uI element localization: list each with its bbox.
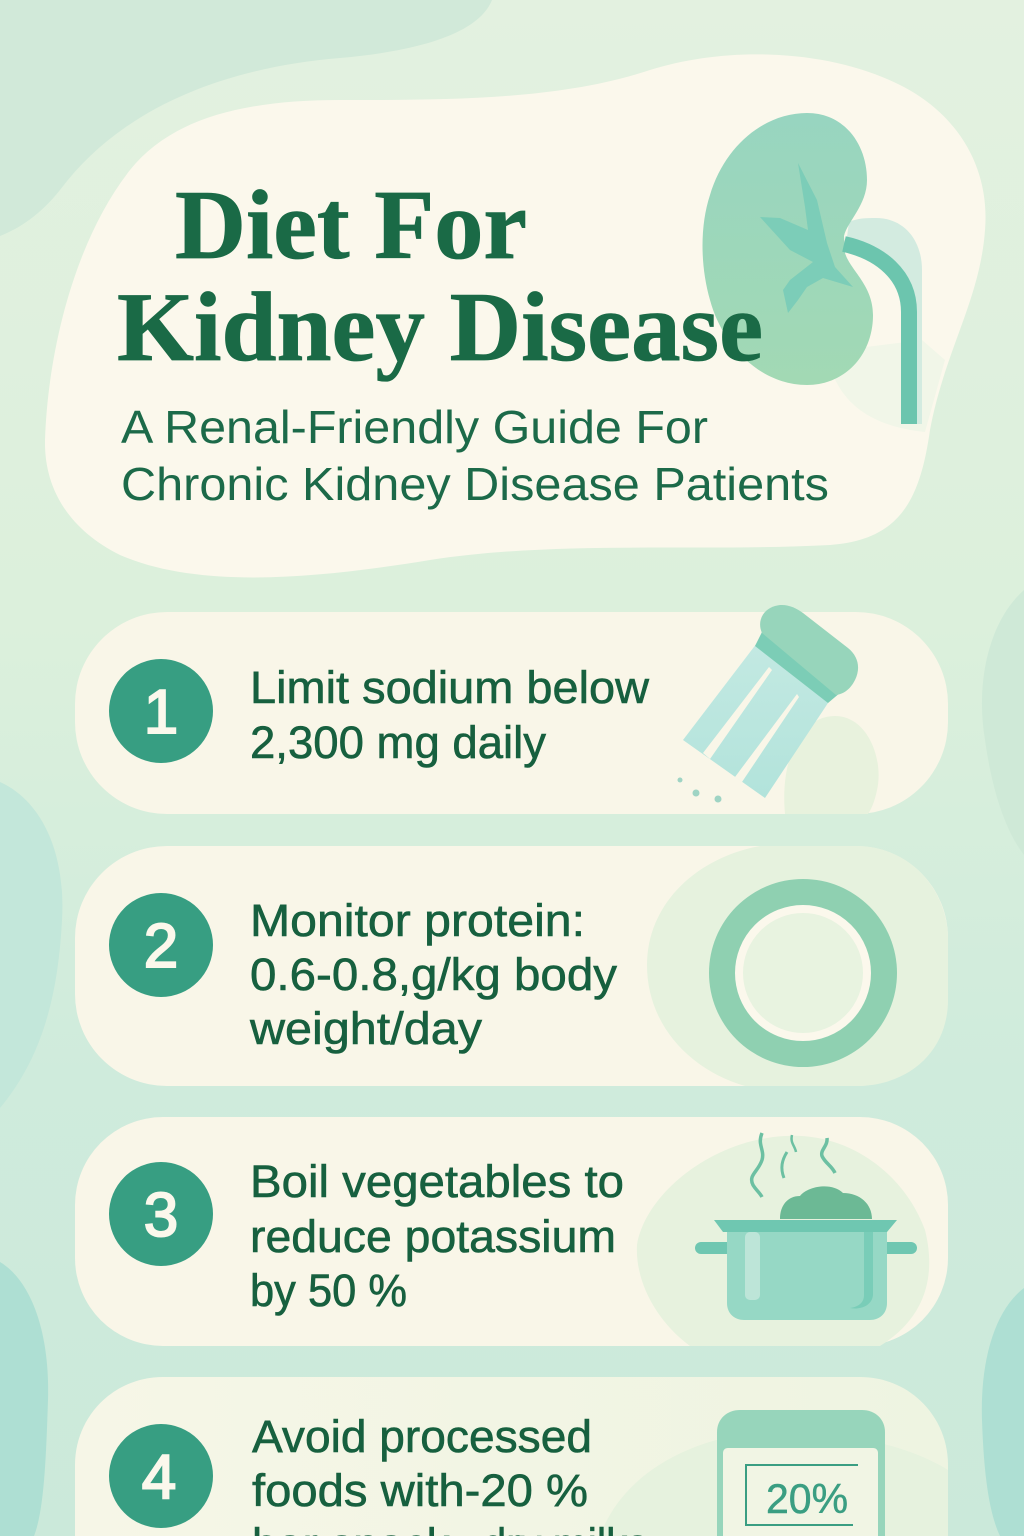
number badge 2 [109,893,213,997]
icon: steaming pot [695,1133,917,1320]
panel: step 1 sodium [75,605,948,814]
number badge 4 [109,1424,213,1528]
title: Diet For [175,171,527,280]
number badge 3: 3 [144,1181,178,1250]
soft shape behind plate [647,846,948,1086]
text: processed foods [252,1411,648,1536]
number badge 3 [109,1162,213,1266]
soft shape behind pot [637,1136,929,1346]
panel: step 2 protein [75,846,948,1086]
background blob: right middle [982,590,1024,855]
background blob: top left [0,0,492,236]
subtitle: Chronic Kidney Disease Patients [121,458,829,510]
text: protein: 0.6-0.8,g/kg body [250,949,618,1000]
background blob: bottom right [982,1288,1024,1536]
text: processed foods: Avoid processed [252,1411,592,1462]
soft shape behind shaker [784,716,879,814]
number badge 1 [109,659,213,763]
number badge 2: 2 [144,912,178,981]
icon: plate [709,879,897,1067]
title: Kidney Disease [117,273,763,382]
soft shape behind label [600,1431,948,1536]
text: boil vegetables: reduce potassium [250,1211,616,1262]
text: processed foods: foods with-20 % [252,1465,588,1516]
icon: salt shaker [678,605,858,802]
background blob: left middle [0,782,62,1108]
panel: step 4 processed foods [75,1377,948,1536]
text: boil vegetables [250,1156,624,1316]
text: sodium limit: 2,300 mg daily [250,717,546,768]
icon: nutrition label [717,1410,885,1536]
text: boil vegetables: Boil vegetables to [250,1156,624,1207]
panel: header [45,54,986,577]
text: protein: weight/day [249,1003,483,1054]
number badge 1: 1 [144,678,178,747]
text: protein [249,895,618,1054]
icon: kidney [702,113,945,432]
icon: nutrition label: 20% [766,1475,848,1522]
number badge 4: 4 [142,1443,176,1512]
text: sodium limit [250,662,650,768]
title [117,171,763,382]
text: sodium limit: Limit sodium below [250,662,650,713]
subtitle: A Renal-Friendly Guide For [121,401,708,453]
text: protein: Monitor protein: [250,895,585,946]
text: boil vegetables: by 50 % [250,1265,407,1316]
panel: step 3 vegetables [75,1117,948,1346]
background blob: bottom left [0,1262,48,1536]
subtitle [121,401,829,510]
